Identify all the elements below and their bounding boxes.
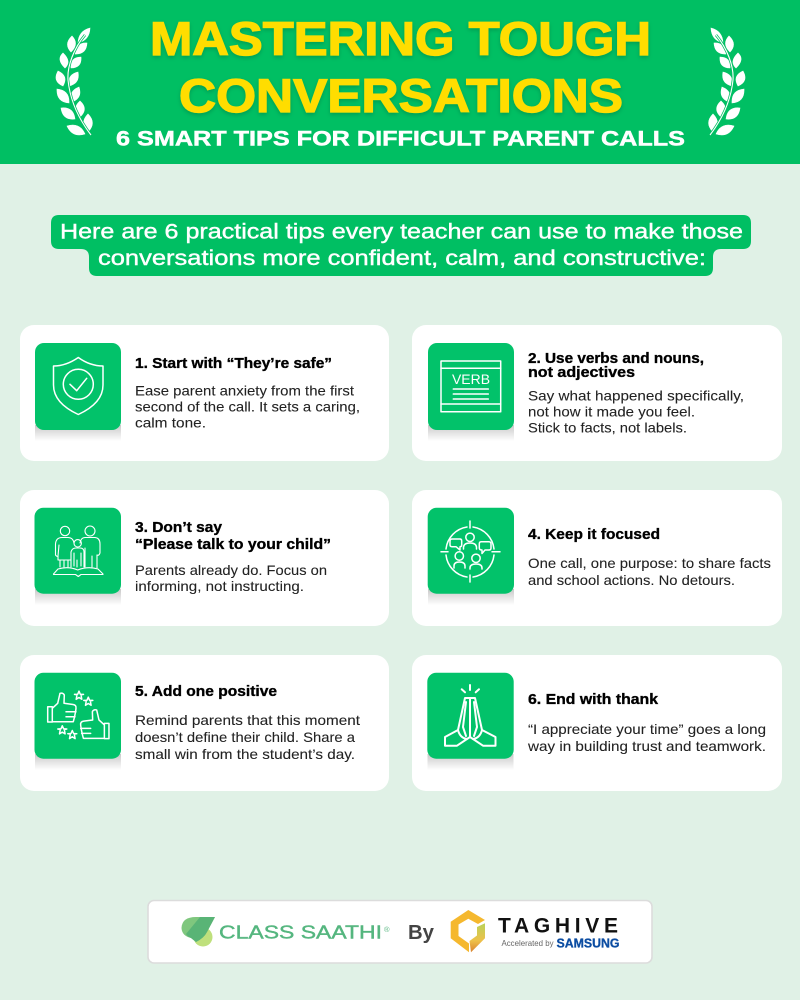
icon: Class Saathi leaf (182, 917, 215, 946)
intro callout: conversations more confident, calm, and constructive: (98, 246, 706, 270)
Taghive wordmark (498, 914, 620, 951)
icon: Taghive hexagon (451, 910, 485, 952)
tip 4 body: One call, one purpose: to share facts (528, 555, 771, 571)
panel: tip 5 (20, 655, 389, 791)
tip 2 body (528, 388, 744, 436)
tip 1 body: second of the call. It sets a caring, (135, 398, 360, 414)
Taghive wordmark: SAMSUNG (556, 936, 620, 951)
title (150, 12, 651, 122)
icon: family on book (34, 508, 121, 594)
icon: left laurel branch (56, 28, 92, 135)
tip 3 heading: 3. Don’t say (135, 520, 222, 536)
tip 3 body: informing, not instructing. (135, 578, 304, 594)
icon: shield with check (35, 343, 121, 430)
tip 2 heading: 2. Use verbs and nouns, (528, 351, 704, 367)
panel: tip 1 (20, 325, 389, 461)
By label: By (408, 922, 435, 944)
subtitle: 6 SMART TIPS FOR DIFFICULT PARENT CALLS (116, 126, 685, 150)
panel: tip 4 (412, 490, 782, 626)
tip 5 body: small win from the student’s day. (135, 746, 355, 762)
panel: tip 3 (20, 490, 389, 626)
footer logo bar (148, 900, 652, 963)
tip 1 body: Ease parent anxiety from the first (135, 382, 354, 398)
icon: target with people (428, 508, 514, 594)
tip 4 body: and school actions. No detours. (528, 572, 735, 588)
tip 2 heading (528, 351, 704, 381)
tip 3 heading (135, 520, 331, 553)
Class Saathi wordmark: CLASS SAATHI (219, 922, 382, 942)
tip 5 heading: 5. Add one positive (135, 684, 277, 700)
intro callout: Here are 6 practical tips every teacher can use to make those (60, 220, 743, 244)
tip 5 body: Remind parents that this moment (135, 712, 360, 728)
header banner (0, 0, 800, 164)
tip 4 body (528, 555, 771, 588)
icon: praying hands (427, 673, 514, 759)
tip 6 heading: 6. End with thank (528, 692, 659, 708)
tip 5 body (135, 712, 360, 762)
Taghive wordmark: Accelerated by (502, 939, 554, 948)
tip 1 body: calm tone. (135, 414, 206, 430)
icon: verb board (428, 343, 514, 430)
tip 2 heading: not adjectives (528, 365, 635, 381)
tip 6 body: way in building trust and teamwork. (527, 738, 766, 754)
tip 3 heading: “Please talk to your child” (135, 537, 331, 553)
panel: tip 2 (412, 325, 782, 461)
tip 1 heading: 1. Start with “They’re safe” (135, 356, 332, 372)
panel: tip 6 (412, 655, 782, 791)
tip 2 body: Say what happened specifically, (528, 388, 744, 404)
title: CONVERSATIONS (179, 69, 623, 122)
intro callout (51, 215, 751, 276)
tip 1 body (135, 382, 360, 430)
tip 5 body: doesn’t define their child. Share a (135, 729, 355, 745)
icon: verb board: VERB (452, 371, 490, 387)
icon: thumbs up with stars (34, 673, 121, 759)
tip 6 body: “I appreciate your time” goes a long (528, 721, 766, 737)
tip 3 body (135, 562, 327, 594)
Class Saathi wordmark: ® (384, 925, 390, 934)
tip 6 body (527, 721, 766, 754)
icon: right laurel branch (709, 28, 745, 135)
tip 4 heading: 4. Keep it focused (528, 527, 660, 543)
title: MASTERING TOUGH (150, 12, 651, 65)
tip 2 body: not how it made you feel. (528, 404, 695, 420)
Taghive wordmark: TAGHIVE (498, 914, 618, 938)
tip 3 body: Parents already do. Focus on (135, 562, 327, 578)
tip 2 body: Stick to facts, not labels. (528, 420, 687, 436)
